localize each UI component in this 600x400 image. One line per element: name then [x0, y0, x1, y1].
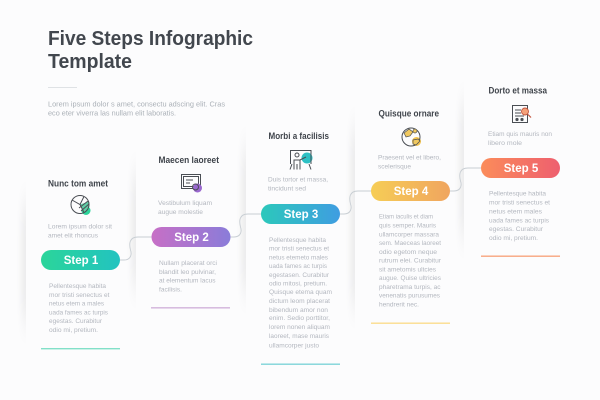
icon: globe	[402, 128, 421, 146]
panel: step 5	[464, 80, 575, 270]
title: Five Steps Infographic	[48, 28, 253, 50]
step 4 description: scelerisque	[378, 163, 411, 170]
step 3 body: lorem nonen aliquam	[269, 324, 330, 331]
step 3 body: dictum leom placerat	[269, 298, 330, 305]
step 3 body: Quisque etema quam	[269, 289, 333, 296]
intro text: Lorem ipsum dolor s amet, consectu adscing elit. Cras	[48, 102, 226, 108]
step 3 body: odio mitosi, pretium.	[269, 281, 327, 288]
panel: step 1	[26, 170, 135, 360]
step 3 body: mor tristi senectus et	[269, 246, 329, 253]
step 5 body: odio mi, pretium.	[489, 235, 538, 242]
step 1 pill: Step 1	[64, 255, 99, 267]
step 5 heading: Dorto et massa	[488, 85, 547, 95]
step 1 body: odio mi, pretium.	[49, 327, 98, 334]
step 5 description: Etiam quis mauris non	[488, 131, 552, 138]
step 2 body: blandit leo pulvinar,	[159, 269, 216, 276]
step 5 body: mor tristi senectus et	[489, 200, 550, 207]
intro text	[48, 102, 226, 118]
step 1 body: netus etem a males	[49, 300, 105, 308]
step 3 pill: Step 3	[284, 209, 318, 221]
panel: step 2	[136, 148, 246, 318]
step 3 body: laoreet, mase mauris	[269, 333, 330, 340]
title	[48, 28, 253, 73]
step 4 body: hendrerit nec.	[379, 302, 419, 309]
step 3 description	[268, 176, 328, 192]
step 2 heading: Maecen laoreet	[158, 155, 219, 165]
step 4 body: pharetrama turpis, ac	[379, 284, 441, 291]
icon: striped circle	[71, 196, 90, 215]
step 4 description	[378, 154, 441, 170]
step 5 body: netus etem males	[489, 209, 543, 216]
step 5 body: Pellentesque habita	[489, 191, 546, 198]
step 2 body: Nullam placerat orci	[159, 260, 218, 267]
step 4 body: quis semper. Mauris	[379, 222, 437, 229]
step 4 pill: Step 4	[394, 186, 429, 198]
step 5 body: egestas. Curabitur	[489, 226, 544, 233]
step 1 body: egestas. Curabitur	[49, 318, 103, 325]
step 3 body: Pellentesque habita	[269, 237, 326, 244]
step 2 body: facilisis.	[159, 286, 182, 294]
step 1 description: Lorem ipsum dolor sit	[48, 224, 112, 230]
step 4 body: sem. Maeceas laoreet	[379, 240, 441, 247]
intro text: eco eter viverra las nullam elit laboratis.	[48, 110, 176, 118]
step 3 body: bibendum amor non	[269, 307, 328, 314]
icon: document with magnifier	[512, 106, 531, 122]
step 1 pill	[41, 250, 120, 270]
step 4 body	[379, 214, 442, 309]
step 1 body	[49, 283, 110, 334]
connector: step 1 to step 2	[120, 237, 152, 260]
step 2 pill: Step 2	[174, 232, 209, 244]
step 3 body: egestasen. Curabitur	[269, 272, 330, 279]
panel: step 3	[246, 125, 355, 375]
step 2 body: at elementum lacus	[159, 278, 216, 284]
connector: step 2 to step 3	[230, 214, 261, 237]
step 4 body: odio egetom neque	[379, 249, 437, 256]
step 3 body: uada fames ac turpis	[269, 263, 328, 270]
step 4 body: Etiam iaculis et diam	[379, 214, 433, 221]
step 2 description: augue molestie	[158, 209, 203, 216]
step 5 body	[489, 191, 550, 242]
step 5 pill	[481, 158, 560, 178]
step 3 description: tincidunt sed	[268, 186, 306, 192]
connector: step 3 to step 4	[340, 191, 371, 214]
title: Template	[48, 51, 132, 73]
step 3 body: netus etemeto males	[269, 255, 329, 262]
step 4 pill	[371, 181, 450, 201]
step 5 body: uada fames ac turpis	[489, 218, 550, 225]
step 3 body	[269, 237, 333, 350]
step 1 heading: Nunc tom amet	[48, 178, 108, 188]
step 5 pill: Step 5	[504, 163, 539, 175]
step 2 body	[159, 260, 218, 294]
step 3 body: ullamcorper justo	[269, 342, 319, 350]
panel: step 4	[355, 102, 464, 337]
step 1 body: Pellentesque habita	[49, 283, 106, 290]
step 2 description	[158, 200, 213, 216]
icon: certificate	[182, 174, 202, 192]
step 4 description: Praesent vel et libero,	[378, 154, 441, 162]
step 3 body: enim. Sedio porttitor,	[269, 315, 330, 322]
step 3 pill	[261, 204, 340, 224]
step 4 body: venenatis purusumes	[379, 293, 441, 300]
step 1 description: amet elit rhoncus	[48, 232, 99, 240]
step 4 body: rutrum elei. Curabitur	[379, 258, 442, 264]
step 4 body: ullamcorper massara	[379, 232, 439, 239]
icon: presenter at board	[290, 150, 312, 170]
step 1 description	[48, 224, 112, 240]
step 5 description	[488, 131, 552, 147]
step 4 body: augue. Quise ultricies	[379, 275, 442, 282]
connector: step 4 to step 5	[450, 168, 481, 191]
step 4 heading: Quisque ornare	[378, 109, 439, 119]
step 1 body: mor tristi senectus et	[49, 292, 110, 299]
step 4 body: sit ametomis ultcies	[379, 267, 437, 274]
step 2 description: Vestibulum liquam	[158, 200, 213, 207]
step 5 description: libero mole	[488, 140, 522, 147]
step 2 pill	[152, 227, 230, 247]
step 1 body: uada fames ac turpis	[49, 310, 109, 316]
step 3 description: Duis tortor et massa,	[268, 176, 328, 184]
step 3 heading: Morbi a facilisis	[268, 131, 329, 141]
